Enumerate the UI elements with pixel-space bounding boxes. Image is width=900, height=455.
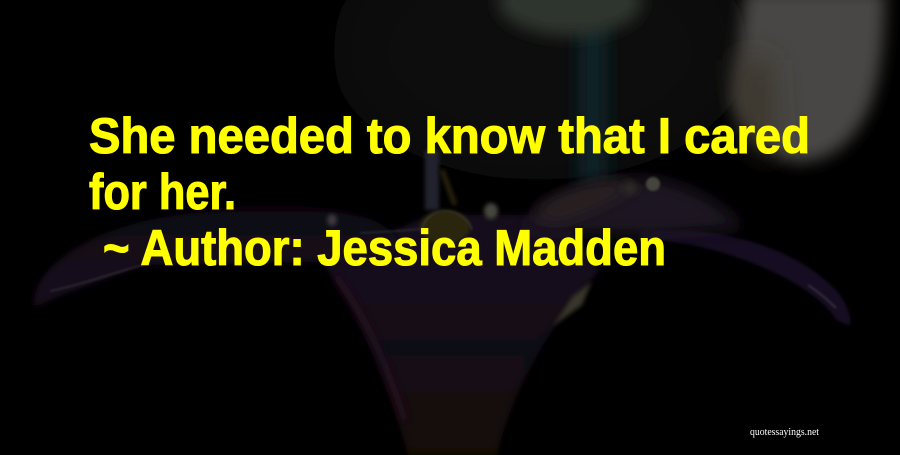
- author attribution: ~ Author: Jessica Madden: [103, 220, 666, 276]
- petal lobe highlight: [530, 182, 632, 220]
- quote line 1: She needed to know that I cared: [89, 108, 810, 164]
- yellow stamen: [442, 170, 455, 205]
- petal rim highlight centre: [360, 228, 430, 233]
- petal rim highlight left: [50, 265, 143, 291]
- upper right petal: [520, 178, 745, 235]
- petal rim highlight right: [808, 285, 836, 308]
- flower cup: [322, 215, 600, 455]
- petal glint: [553, 281, 592, 326]
- anther centre: [420, 210, 470, 244]
- quote text: [89, 108, 810, 220]
- red petal edge: [335, 275, 405, 420]
- flower: purple lily: [34, 150, 850, 455]
- left petal: [34, 206, 397, 306]
- stamen tips: [484, 203, 498, 219]
- watermark: quotessayings.net: [750, 426, 819, 438]
- right petal: [640, 229, 850, 326]
- pale stamen column: [425, 150, 439, 210]
- quote line 2: for her.: [89, 164, 236, 220]
